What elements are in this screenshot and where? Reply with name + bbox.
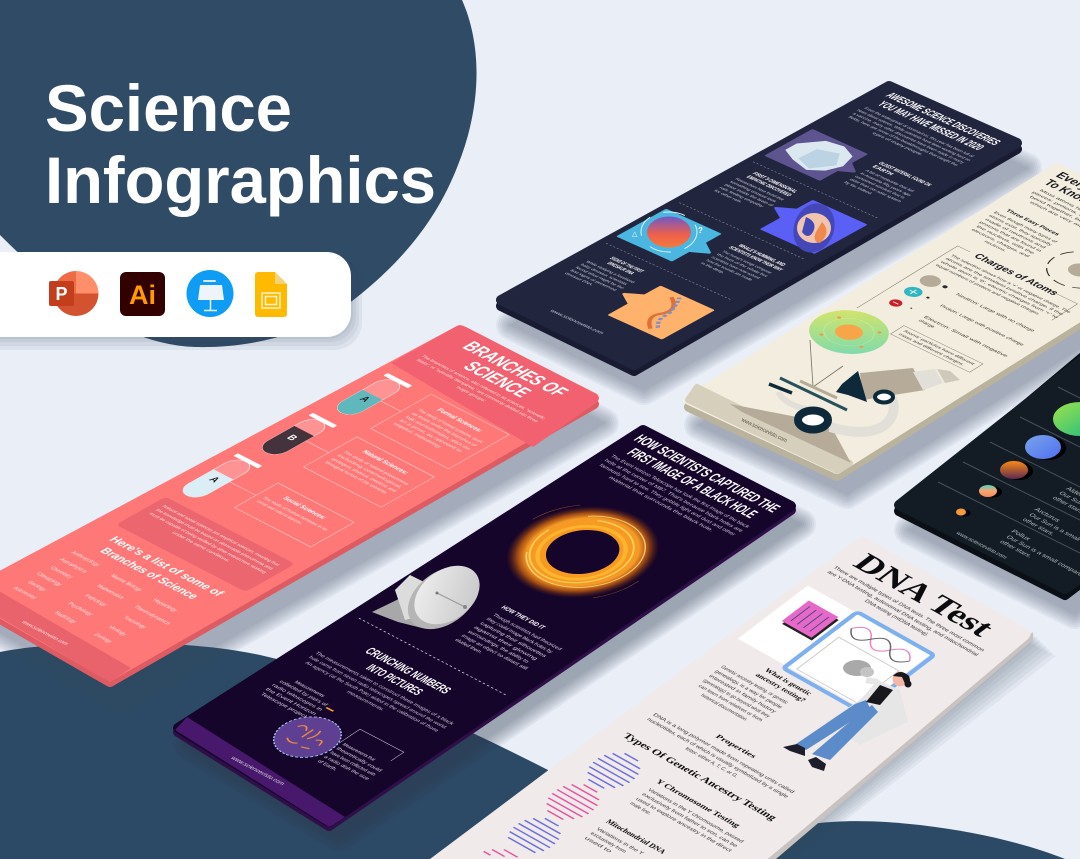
list: branches column 1: Geology: [25, 580, 48, 592]
heading: how scientists captured: [615, 432, 784, 525]
illustration panel: [735, 585, 934, 711]
text: whale humming: SCIENTISTS KNOW THEIR WHY: [727, 246, 784, 272]
list: branches column 3: Thermodynamics: [132, 605, 172, 626]
legend text: [914, 293, 1044, 362]
box: formal sciences: logic and mathematics, which use: [404, 415, 473, 451]
callout panel: must be capable of being verified by other researchers working: [148, 512, 268, 574]
text: pollux: Pollux: [1009, 529, 1032, 542]
text: first dinosaur dna: DINOSAUR DNA: [605, 262, 635, 276]
text: first 3 dimensional: rats feeling empathy: [718, 186, 766, 208]
list: branches column 1: [9, 551, 101, 602]
subheading: what is genetic ancestry testing: What is genetic: [763, 666, 815, 697]
box: natural sciences: including cosmological,: [336, 454, 404, 489]
icon: aldebaran star: [1000, 461, 1033, 480]
text block: atoms exist, they specially: [988, 214, 1054, 247]
icon: proton: [900, 285, 934, 303]
heading: list of branches: Here's a list of some of: [106, 535, 227, 598]
callout panel: under the same conditions.: [171, 531, 232, 563]
text: oldest material: A bit of meteorite that fell: [864, 169, 916, 193]
box: formal sciences: empirical, methodology.: [392, 422, 444, 449]
text: whale humming: the hum of the whale but: [715, 253, 770, 278]
text: first dinosaur dna: found what might be the: [574, 266, 627, 290]
text: y chromosome testing: Y Chromosome Testing: [654, 778, 742, 829]
icon: paper sheet: [797, 637, 899, 703]
list: branches column 1: Climatology: [34, 572, 63, 587]
text: how they did it: they could image black holes by: [484, 617, 554, 655]
icon: dark test tube: [254, 413, 337, 459]
icon: egg illustration: [787, 198, 841, 258]
icon: dna helix blue lower: [504, 812, 570, 855]
text block: atoms are the smallest positive charge, if the: [944, 257, 1065, 316]
intro text: There are multiple types of DNA tests. The three most common: [831, 565, 985, 653]
text: first 3 dimensional: EMPATHIC DISCOVERED: [744, 175, 793, 198]
text block: hole came from seven radio telescopes spread around the world.: [307, 655, 449, 730]
text: measurements theoretical: [315, 742, 390, 786]
header band: [391, 326, 598, 447]
heading: science infographics: Science: [45, 71, 292, 145]
icon: keynote: [186, 270, 234, 317]
footer url: www.sciencevisto.com: [953, 530, 1009, 560]
icon: dna helix blue: [578, 747, 650, 794]
icon: light test tube: [175, 453, 262, 502]
icon: dna helix pink: [537, 778, 609, 825]
text: how they did it: surroundings, the ability to: [466, 630, 530, 664]
intro text: fields, here are some of the breakthroughs that caught the: [847, 115, 960, 167]
icon: dna bubble: [597, 281, 712, 338]
text: measurements theoretical: Measurements that: [340, 742, 377, 762]
text: how they did it: [451, 605, 574, 677]
box: formal sciences: Formal Sciences:: [435, 408, 484, 433]
text: first dinosaur dna: [564, 252, 651, 296]
icon: blue star: [1025, 435, 1066, 460]
footer band: [175, 717, 345, 827]
icon: teal test tube: [329, 373, 412, 419]
text: first dinosaur dna: dinosaur DNA.: [564, 272, 595, 286]
intro text: fields", or "scientific disciplines," are commonly divided into three: [415, 358, 540, 423]
text block: neutrons.: [983, 240, 1008, 252]
heading: crunching numbers: CRUNCHING NUMBERS: [362, 645, 455, 696]
text: measurements theoretical: of Earth.: [315, 759, 339, 772]
bubble: blue: [749, 195, 865, 253]
text block: whole atom is '0', electric charges from '+' to: [939, 260, 1060, 319]
text: oldest material: by far, indeed.: [843, 181, 874, 195]
heading: branches of science: BRANCHES OF: [458, 338, 574, 399]
intro text: hole at the center of M87. That's because black holes are: [602, 458, 745, 533]
text block: nucleotides, each of which is usually symbolized by a single: [645, 717, 789, 799]
text: first 3 dimensional: [713, 170, 800, 213]
footer url: www.sciencevisto.com: [547, 309, 605, 336]
heading: dna test: DNA Test: [846, 548, 1003, 642]
text: mitochondrial dna: used to: [582, 836, 613, 854]
icon: orbit: [1033, 244, 1080, 296]
text block: Genetic ancestry testing, or genetic: [719, 665, 789, 705]
text block: [294, 651, 455, 739]
text: whale humming: scientists have now solved: [710, 256, 762, 280]
atom illustration: [793, 301, 905, 363]
box: formal sciences: [350, 384, 509, 469]
legend text: Proton: Large with positive charge: [938, 304, 1025, 347]
box: social sciences: [208, 469, 354, 547]
text block: [963, 211, 1059, 263]
text block: made of neutrons and: [984, 218, 1048, 249]
text block: The measurements taken to construct these images of a black: [313, 651, 455, 726]
intro text: famously hard to see. They gobble light and dust and other: [597, 463, 737, 537]
box: natural sciences: [280, 425, 434, 507]
intro text: eyes of many people.: [871, 131, 925, 156]
intro text: news about science. While scientists have been working hard on: [855, 108, 973, 162]
panel: atoms: [688, 166, 1080, 476]
icon: cell illustration: △: [632, 231, 638, 238]
icon: helix: [845, 623, 916, 666]
text: oldest material: [843, 162, 933, 206]
text: how they did it: Though scientists had theorized: [491, 613, 563, 652]
subheading: what is genetic ancestry testing: ancestry testing?: [753, 671, 809, 704]
text: first dinosaur dna: first signs of preserved: [569, 269, 619, 292]
intro text: a vaccine, many other discoveries have been made in many: [851, 112, 967, 164]
footer url: www.sciencevisto.com: [739, 417, 788, 444]
box: formal sciences: The study of formal systems, such: [416, 408, 485, 444]
icon: dna helix pink lower: [484, 850, 518, 857]
text: measurements collected: Telescope project.: [258, 692, 310, 720]
subheading: types of genetic ancestry testing: Types Of Genetic Ancestry Testing: [620, 732, 780, 823]
text block: protons that are found in: [978, 221, 1044, 253]
text: y chromosome testing: [626, 778, 757, 858]
text: first dinosaur dna: While studying a fossilized: [585, 260, 637, 284]
heading: how scientists captured: HOW SCIENTISTS CAPTURED THE: [630, 432, 784, 515]
heading: crunching numbers: INTO PICTURES: [363, 662, 427, 697]
list: branches column 3: Hepatology: [151, 598, 179, 613]
intro text: DNA testing (mtDNA testing).: [863, 599, 931, 638]
intro text: major groups:: [455, 385, 488, 403]
heading: crunching numbers: [348, 645, 455, 705]
text: whale humming: [699, 242, 790, 287]
text: measurements theoretical: have been collected with: [328, 751, 377, 777]
icon: electron: [886, 298, 914, 313]
divider lines: [938, 387, 1080, 553]
list: branches column 1: Chemistry: [48, 566, 74, 580]
text: first dinosaur dna: baby dinosaur, scientists: [579, 263, 629, 286]
text block: interested in family history: [707, 674, 777, 715]
list: branches column 2: Pathology: [82, 594, 108, 607]
text block: An agency (at the South Pole) aided in the calibration of those: [303, 661, 440, 733]
heading: awesome science discoveries: [870, 91, 1004, 154]
intro text: [819, 565, 985, 662]
panel: awesome science discoveries: [501, 86, 1017, 371]
box: social sciences: The study of human behavior in its: [261, 496, 330, 532]
icon: green star: [1053, 402, 1080, 436]
heading: list of branches: Branches of Science: [97, 546, 202, 601]
box: natural sciences: The study of natural phenomena: [342, 450, 411, 486]
text: aldebaran: [1051, 486, 1080, 544]
orange marker: [325, 707, 334, 712]
text: y chromosome testing: Variations in the Y chromosome, passed: [646, 788, 745, 844]
list: branches column 3: Zoology: [92, 633, 113, 644]
text: arcturus: Arcturus: [1032, 507, 1062, 524]
heading: branches of science: SCIENCE: [458, 358, 537, 400]
text block: [934, 254, 1073, 324]
intro text: [1021, 187, 1080, 262]
text: measurements collected: the Event Horizon: [263, 687, 318, 716]
panel: stars and planets: [899, 351, 1080, 596]
subheading: three easy pieces: Three Easy Pieces: [1004, 209, 1061, 237]
callout box: mass and different charges.: [897, 332, 966, 366]
icon: powerpoint: [49, 271, 98, 316]
text: whale humming: The hump's songs compose: [721, 250, 774, 274]
icon: powerpoint: P: [55, 284, 68, 304]
panel: dna test: [430, 537, 1033, 859]
text: mitochondrial dna: [582, 818, 668, 856]
text: first 3 dimensional: Researchers have found that: [734, 177, 786, 201]
software badge bar: [0, 252, 351, 337]
text: how they did it: capturing their silhouettes: [478, 621, 548, 659]
box: natural sciences: Natural Sciences:: [360, 449, 410, 476]
black hole illustration: [470, 485, 695, 619]
illustration: scientist: [783, 660, 912, 771]
text: mitochondrial dna: exclusively from: [588, 831, 628, 854]
text: oldest material: OLDEST MATERIAL FOUND ON: [876, 162, 932, 187]
intro text: are Y-DNA testing, autosomal DNA testing, and mitochondrial: [825, 570, 979, 657]
footer band: [0, 580, 131, 682]
icon: illustrator: Ai: [129, 280, 156, 310]
icon: pink gel board: [780, 601, 841, 640]
text: arcturus: other stars.: [1020, 517, 1056, 537]
subheading: charges of atoms: Charges of Atoms: [971, 252, 1061, 297]
text: first dinosaur dna: SIGNS OF THE FIRST: [608, 257, 645, 274]
list: branches column 3: Toxicology: [121, 616, 148, 630]
callout box: Atoms' particles have different: [902, 329, 977, 366]
text: measurements theoretical: theoretically could: [334, 747, 383, 773]
text: y chromosome testing: male line.: [628, 801, 653, 816]
text: y chromosome testing: used to explore ancestry in the direct: [634, 797, 733, 854]
list: branches column 2: Radiology: [52, 611, 78, 624]
text block: equal numbers of protons and negative charges.: [934, 263, 1042, 316]
text: whale humming: WHALE'S HUMMING, AND: [736, 244, 787, 267]
icon: cell illustration: [632, 212, 703, 252]
footer url: www.sciencevisto.com: [228, 756, 286, 786]
text: how they did it: HOW THEY DID IT: [499, 605, 546, 631]
text block: (genealogy) to go beyond what they: [701, 679, 771, 719]
text block: genealogy, is a way for people: [713, 669, 783, 710]
list: branches column 3: [87, 596, 187, 651]
text block: Even though many types of: [993, 211, 1059, 244]
box outline: charges: [857, 245, 1078, 367]
box: formal sciences: as those under the branches of: [410, 412, 479, 448]
text: y chromosome testing: exclusively from father to son, can be: [640, 792, 739, 849]
bubble: cyan: [619, 210, 732, 266]
icon: iceberg bubble: [767, 130, 876, 184]
box: natural sciences: biological factors of the universe.: [324, 460, 390, 495]
text block: the nucleus, with the: [975, 225, 1037, 255]
text: measurements theoretical: a radio dish the size: [322, 755, 371, 781]
icon: cell illustration: ?: [698, 226, 703, 235]
list: branches column 1: Astrophysics: [57, 558, 89, 574]
legend text: charge: [916, 319, 936, 329]
icon: light test tube: A: [206, 476, 222, 484]
callout box: [891, 326, 983, 372]
text block: can learn from relatives or from: [696, 684, 764, 723]
blob: bottom left: [0, 643, 548, 859]
list: branches column 2: [47, 574, 144, 627]
list: branches column 2: Marine Biology: [108, 574, 144, 592]
text: pollux: other stars.: [998, 539, 1034, 559]
icon: radio dish: [372, 554, 491, 642]
text: first 3 dimensional: something unusual took: [729, 180, 779, 203]
box: natural sciences: geological, physical, chemical, and: [330, 457, 399, 493]
text block: DNA is a long polymer made from repeating units called: [651, 713, 795, 795]
intro text: The Event Horizon Telescope has took the first image of the black: [609, 454, 751, 529]
text: how they did it: against their glowing: [472, 625, 539, 661]
callout line: [339, 729, 404, 766]
blob: top left: [0, 0, 477, 347]
text block: electrons, charges, and: [970, 228, 1031, 258]
list: branches column 1: Astronomy: [11, 586, 38, 600]
heading: how scientists captured: FIRST IMAGE OF A BLACK HOLE: [623, 446, 761, 521]
text: whale humming: how the sounds are made: [705, 259, 755, 282]
list: branches column 1: Anthropology: [69, 551, 101, 567]
text: mitochondrial dna: Variations in the Y: [594, 827, 645, 856]
list: branches column 3: Virology: [106, 625, 128, 637]
text block: The selection shows how a '+' or negative charge. The: [949, 254, 1073, 314]
callout panel: [116, 497, 295, 592]
callout panel: the knowledge must be based on observable phenomena and: [155, 508, 275, 571]
intro text: From the widespread of coronavirus, this year has been full of: [863, 107, 976, 158]
text: oldest material: in Australia fifty years ago: [859, 172, 913, 197]
callout panel: Natural and social sciences are empirical sciences, meaning that: [161, 504, 282, 567]
text: measurements collected: [257, 675, 337, 721]
text: first 3 dimensional: for other rats.: [713, 189, 744, 204]
icon: neutron: [915, 273, 953, 293]
heading: science infographics: [45, 71, 436, 217]
text: oldest material: older than our solar system: [848, 178, 904, 203]
heading: awesome science discoveries: AWESOME SCIENCE DISCOVERIES: [883, 91, 1004, 147]
box: social sciences: social and cultural aspects.: [255, 499, 305, 525]
text: whale humming: in the deep.: [700, 261, 726, 274]
text block: historical documentation.: [699, 693, 750, 723]
text: mitochondrial dna: Mitochondrial DNA: [604, 818, 668, 855]
heading: awesome science discoveries: YOU MAY HAVE MISSED IN 2020: [874, 99, 988, 152]
box: formal sciences: an a priori, as opposed to: [398, 418, 465, 453]
icon: arcturus star: [979, 485, 1002, 498]
intro text: [590, 454, 751, 542]
panel: branches of science: [0, 326, 598, 682]
intro text: material that surrounds the black hole.: [607, 476, 715, 533]
text: how they did it: eluded them.: [453, 638, 484, 655]
text: oldest material: EARTH: [870, 165, 894, 176]
icon: illustrator: [120, 272, 165, 316]
microscope illustration: [730, 340, 960, 463]
list: branches column 2: Psychology: [66, 602, 94, 617]
text: how they did it: image an object so distant still: [459, 634, 529, 671]
panel: black hole: [175, 430, 791, 827]
text: oldest material: contained stardust that is: [854, 175, 907, 199]
text block: [689, 665, 789, 728]
text block: measurements.: [345, 690, 386, 712]
text: measurements collected: collected by pairs of: [277, 680, 329, 708]
intro text: [408, 354, 548, 427]
footer url: www.sciencevisto.com: [19, 620, 70, 647]
icon: teal test tube: A: [356, 395, 372, 404]
text: first 3 dimensional: place inside the brain of: [723, 183, 776, 207]
text: measurements collected: radio telescopes in: [270, 683, 324, 712]
icon: google slides: [255, 272, 287, 317]
legend text: Electron: Small with negative: [922, 315, 1009, 358]
icon: dark test tube: B: [284, 434, 300, 442]
list: branches column 2: Mathematics: [95, 584, 126, 600]
text: first 3 dimensional: FIRST 3-DIMENSIONAL: [750, 172, 799, 194]
box: social sciences: Social Sciences:: [281, 496, 328, 521]
blob: bottom right: [760, 821, 1065, 859]
subheading: properties: Properties: [714, 733, 759, 760]
icon: measurements circle: [260, 709, 355, 766]
text: measurements collected: Measurements: [292, 680, 326, 699]
legend text: Neutron: Large with no charge: [954, 293, 1036, 333]
intro text: The branches of science, also referred to as sciences, "scientific: [420, 354, 548, 420]
footer band: [688, 387, 850, 471]
heading: science infographics: Infographics: [45, 143, 436, 217]
text block: letter: either A, T, C, or G.: [683, 747, 740, 779]
icon: pollux star: [956, 508, 970, 516]
